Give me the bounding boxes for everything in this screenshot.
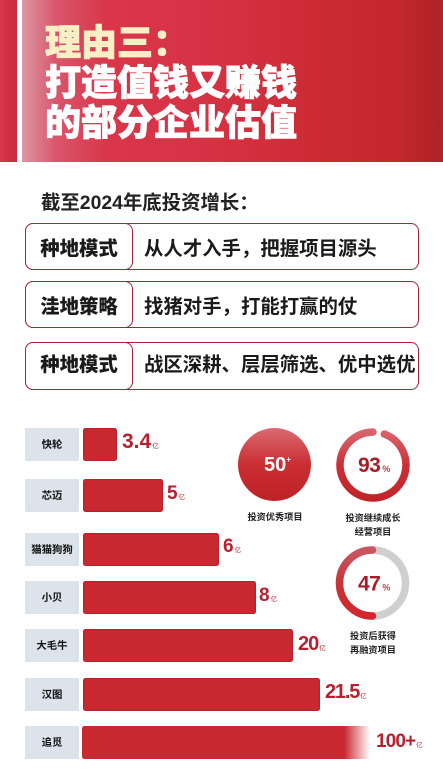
- caption: 投资后获得再融资项目: 再融资项目: [350, 645, 396, 655]
- row 2 tag: 洼地策略: [40, 296, 118, 318]
- row 2 tag: [25, 281, 133, 328]
- label: 追觅: 追觅: [42, 738, 62, 749]
- subheading: 截至2024年底投资增长：: [41, 192, 259, 214]
- bar: 汉图: [83, 678, 320, 711]
- caption: 投资后获得再融资项目: 投资后获得: [350, 631, 396, 641]
- label: 快轮: [25, 428, 79, 461]
- caption: 投资后获得再融资项目: [350, 631, 396, 655]
- value: 5亿: 5亿: [167, 483, 185, 504]
- caption: 投资优秀项目: 投资优秀项目: [247, 512, 303, 522]
- label: 汉图: 汉图: [42, 690, 62, 701]
- label: 芯迈: 芯迈: [42, 491, 62, 502]
- title line 3: 的部分企业估值: [45, 102, 297, 143]
- label: 大毛牛: [25, 629, 79, 662]
- label: 大毛牛: 大毛牛: [36, 641, 68, 652]
- bar: 追觅 fading: [82, 726, 370, 759]
- value: 100+亿: 100+亿: [376, 731, 423, 752]
- title: [45, 22, 297, 143]
- stat: 93% ring: [340, 432, 406, 498]
- label: 汉图: [25, 678, 79, 711]
- value: 8亿: 8亿: [259, 585, 277, 606]
- strategy row 2: [25, 281, 419, 328]
- title line 1: 理由三：: [45, 22, 189, 63]
- row 3 tag: 种地模式: [40, 354, 118, 376]
- label: 芯迈: [25, 479, 79, 512]
- stat: 47% ring: [340, 550, 406, 616]
- bar: 芯迈: [83, 479, 163, 512]
- row 2 description: 找猪对手，打能打赢的仗: [144, 296, 357, 318]
- caption: 投资继续成长经营项目: [345, 513, 401, 537]
- stat: 50+ circle: +: [286, 455, 291, 464]
- header banner: [22, 0, 443, 162]
- strategy row 3: [25, 342, 419, 390]
- title line 2: 打造值钱又赚钱: [45, 62, 297, 103]
- value: 6亿: 6亿: [223, 536, 241, 557]
- strategy row 1: [25, 223, 419, 270]
- stat: 47% ring: 47%: [358, 572, 390, 596]
- row 1 frame: [25, 223, 419, 270]
- row 1 tag: 种地模式: [40, 238, 118, 260]
- row 1 tag: [25, 223, 133, 270]
- stat: 93% ring: 93%: [358, 454, 390, 477]
- value: 20亿: 20亿: [298, 633, 326, 655]
- value: 21.5亿: 21.5亿: [325, 681, 367, 703]
- value: 3.4亿: 3.4亿: [122, 430, 159, 453]
- bar: 猫猫狗狗: [83, 533, 219, 566]
- bar: 小贝: [83, 581, 256, 614]
- bar: 大毛牛: [83, 629, 293, 662]
- label: 追觅: [25, 726, 79, 759]
- stat: 50+ circle: 50: [264, 454, 286, 476]
- header left strip: [0, 0, 17, 162]
- label: 猫猫狗狗: [25, 533, 79, 566]
- bar: 快轮: [83, 428, 117, 461]
- row 2 frame: [25, 281, 419, 328]
- row 3 frame: [25, 342, 419, 390]
- caption: 投资继续成长经营项目: 投资继续成长: [345, 513, 401, 523]
- label: 猫猫狗狗: 猫猫狗狗: [31, 545, 73, 556]
- row 1 description: 从人才入手，把握项目源头: [144, 238, 377, 260]
- caption: 投资继续成长经营项目: 经营项目: [355, 527, 391, 537]
- label: 快轮: 快轮: [42, 440, 62, 451]
- bar chart: [25, 428, 423, 759]
- row 3 description: 战区深耕、层层筛选、优中选优: [144, 354, 415, 376]
- stat: 50+ circle: [238, 428, 311, 501]
- label: 小贝: [25, 581, 79, 614]
- row 3 tag: [25, 342, 133, 390]
- label: 小贝: 小贝: [42, 593, 62, 604]
